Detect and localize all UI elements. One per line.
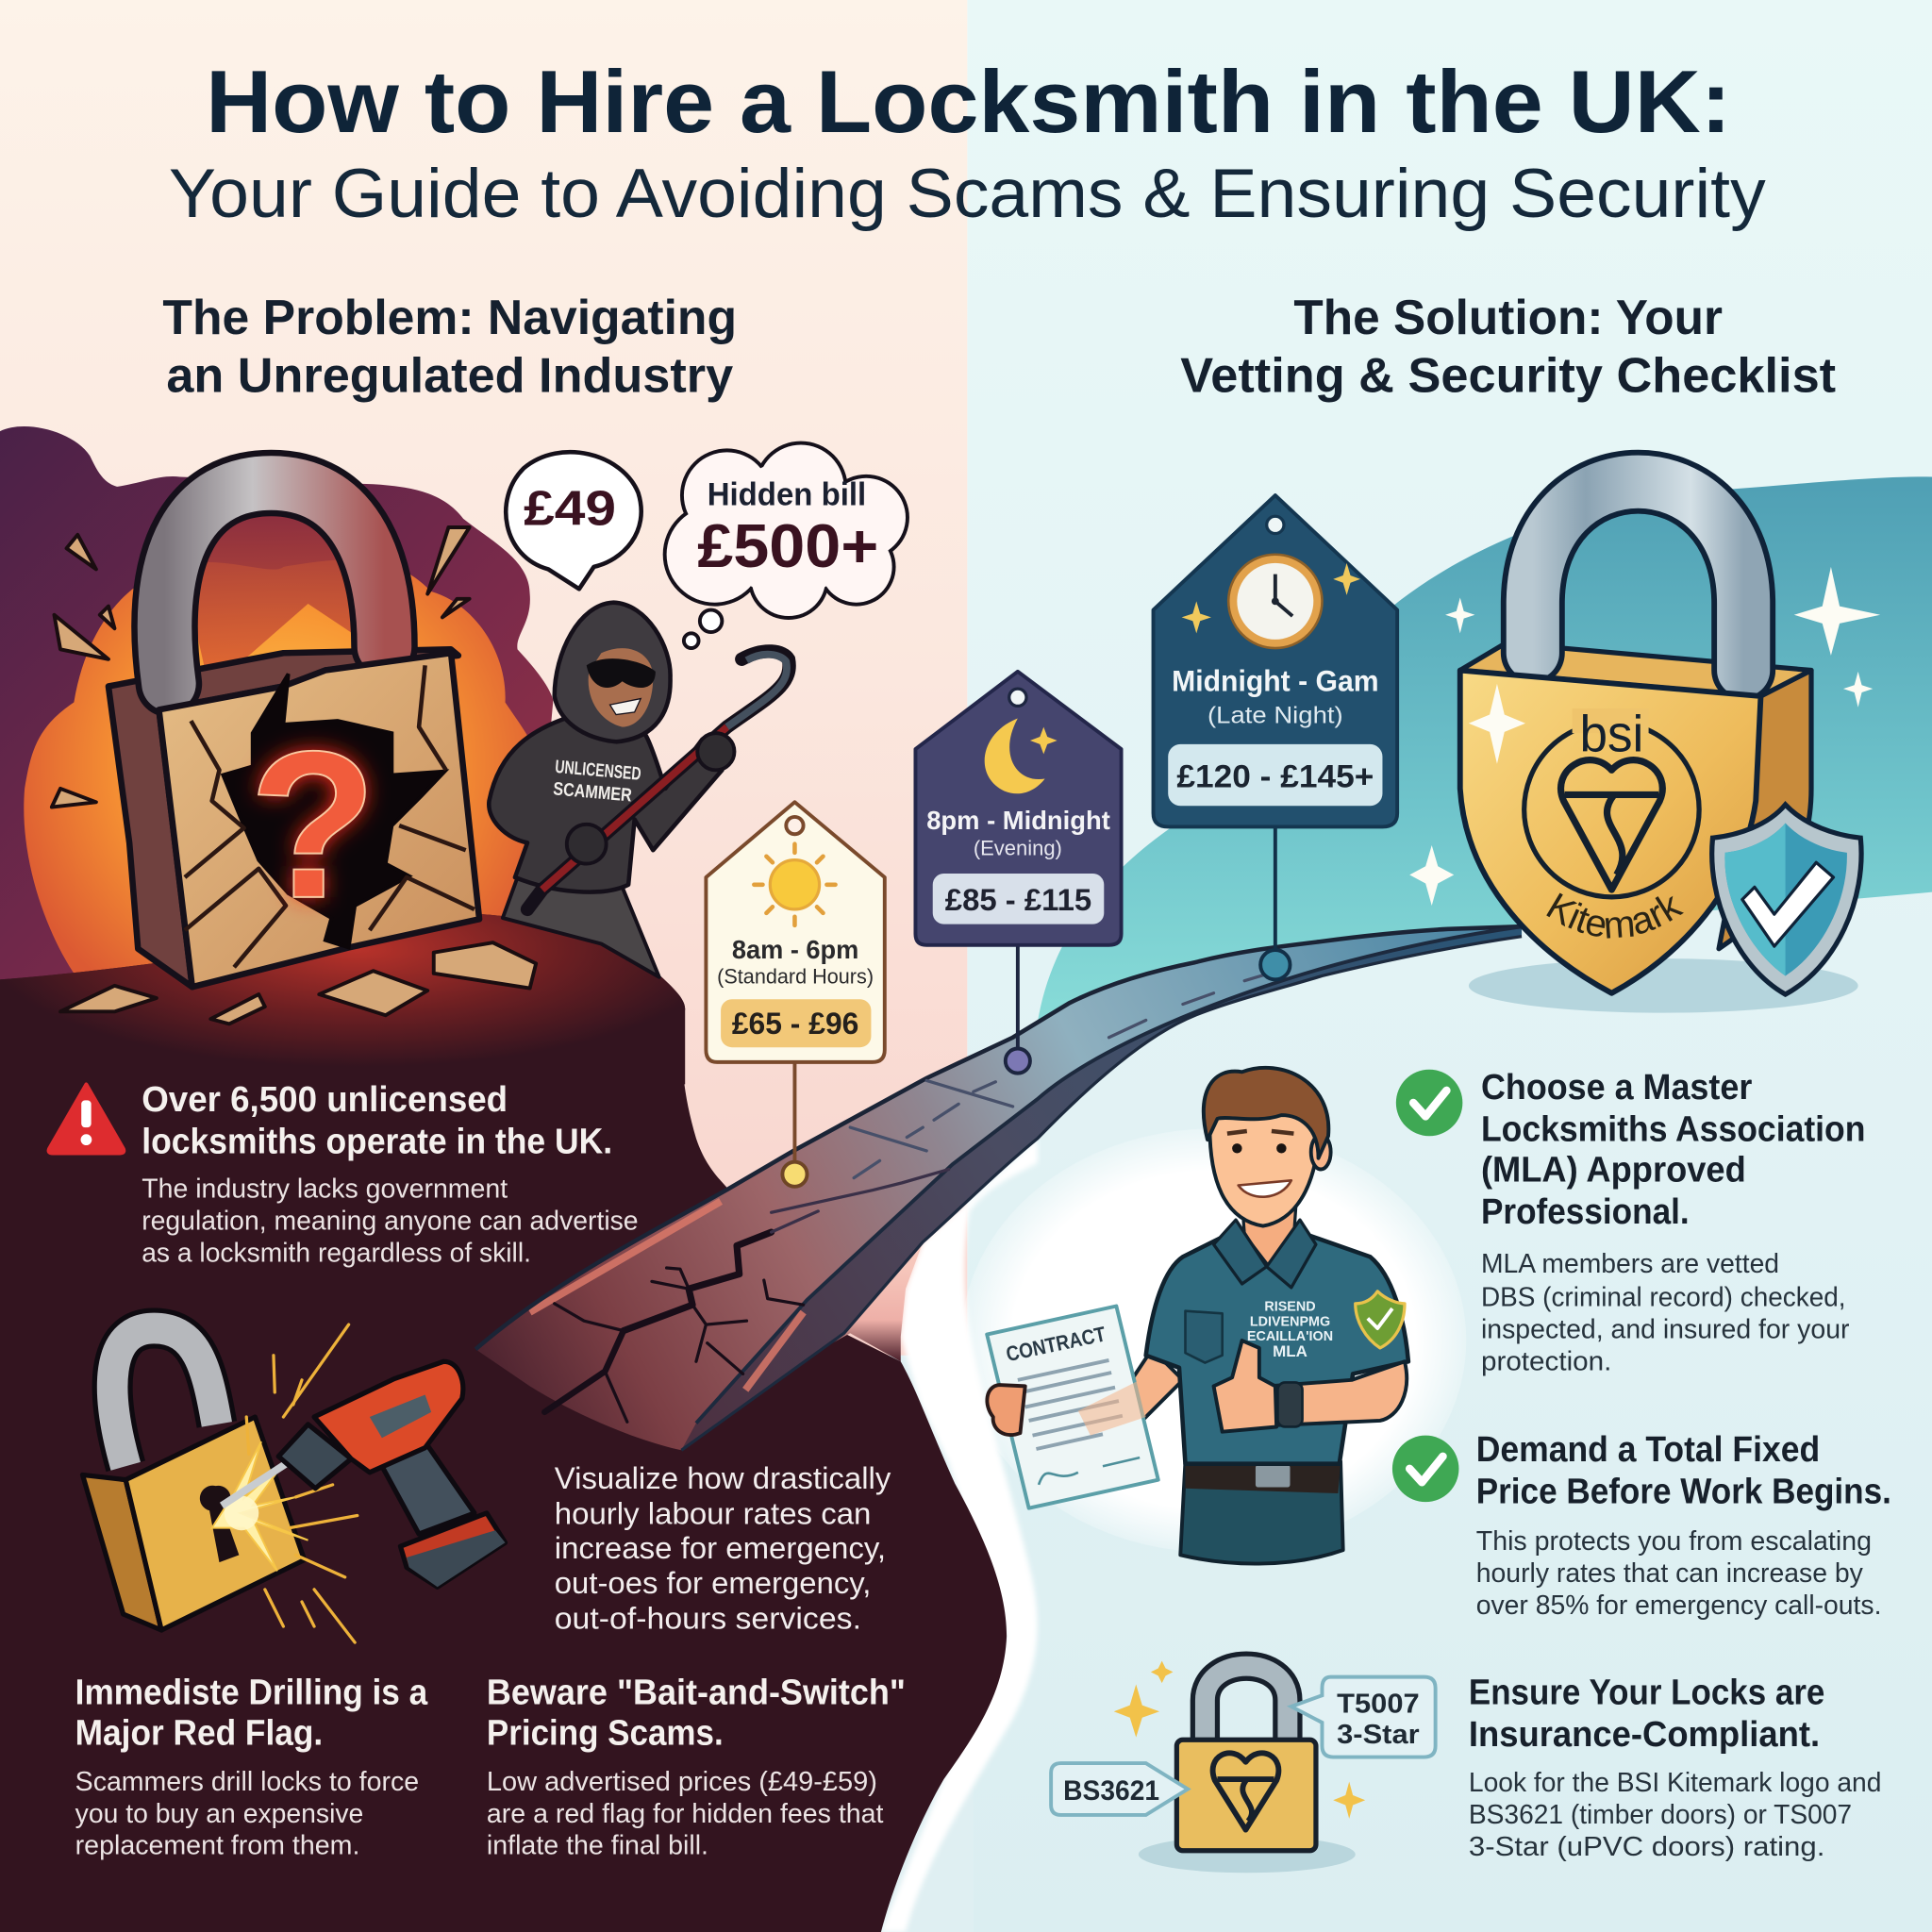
scammer gloves xyxy=(567,824,607,864)
check item: MLA: DBS (criminal record) checked, xyxy=(1481,1282,1846,1312)
scammer face xyxy=(589,648,653,727)
icon: clock xyxy=(1228,555,1322,648)
check item: fixed price: Price Before Work Begins. xyxy=(1476,1472,1891,1511)
alert block: The industry lacks government xyxy=(142,1174,508,1205)
price tag: standard hours xyxy=(706,802,885,1187)
lock shards xyxy=(52,527,536,1024)
speech bubble: £49: £49 xyxy=(524,481,616,536)
belt xyxy=(1185,1460,1341,1493)
title: How to Hire a Locksmith in the UK: xyxy=(206,52,1731,151)
question mark: ? xyxy=(249,708,377,942)
body front face xyxy=(158,653,479,987)
alert block: Over 6,500 unlicensed xyxy=(142,1080,508,1120)
callout: TS007: T5007 xyxy=(1337,1690,1420,1720)
text: visualize rates: out-oes for emergency, xyxy=(555,1565,871,1600)
thought cloud: hidden bill: Hidden bill xyxy=(708,477,866,513)
scammer character xyxy=(489,603,790,977)
drill battery xyxy=(400,1513,506,1587)
icon: gold stars xyxy=(1182,563,1360,633)
drill keyhole xyxy=(200,1486,239,1562)
white curve beside the dark panel xyxy=(881,1139,1038,1932)
title: Your Guide to Avoiding Scams & Ensuring Security xyxy=(169,156,1766,232)
text: immediate drilling: Immediste Drilling is a xyxy=(75,1673,428,1712)
check item: fixed price: Demand a Total Fixed xyxy=(1476,1430,1820,1470)
check item: insurance: Look for the BSI Kitemark logo and xyxy=(1469,1768,1881,1798)
small lock shackle xyxy=(1205,1666,1288,1750)
text: visualize rates: hourly labour rates can xyxy=(555,1496,871,1531)
heading: the solution: The Solution: Your xyxy=(1293,291,1723,345)
text: bait and switch xyxy=(487,1673,906,1861)
gold sparkles xyxy=(1114,1661,1365,1819)
locksmith halo xyxy=(961,1128,1466,1553)
check item: MLA: Locksmiths Association xyxy=(1481,1109,1865,1149)
thumbs up hand xyxy=(1214,1341,1276,1432)
check item: MLA xyxy=(1396,1068,1865,1376)
road surface xyxy=(475,926,1522,1450)
check item: MLA: Professional. xyxy=(1481,1192,1690,1232)
heading: the solution: Vetting & Security Checklist xyxy=(1180,348,1836,403)
callout: BS3621 xyxy=(1051,1763,1188,1815)
contract: CONTRACT xyxy=(1004,1322,1108,1366)
heading: the problem: an Unregulated Industry xyxy=(166,348,733,403)
small lock body xyxy=(1176,1740,1316,1851)
road outer edge line xyxy=(681,937,1522,1450)
text: visualize rates: Visualize how drastically xyxy=(555,1460,891,1495)
trousers xyxy=(1180,1461,1343,1564)
padlock shadow xyxy=(1469,958,1858,1013)
text: immediate drilling: replacement from them. xyxy=(75,1831,359,1861)
icon: green check xyxy=(1396,1070,1462,1136)
road crack xyxy=(544,1170,949,1422)
price tag: evening xyxy=(915,672,1122,1074)
heading: the problem: The Problem: Navigating xyxy=(162,291,737,345)
drill chuck xyxy=(278,1424,351,1489)
drill lock side xyxy=(83,1474,161,1630)
price tag: late night: Midnight - Gam xyxy=(1172,665,1379,698)
price tag: evening: £85 - £115 xyxy=(945,882,1091,917)
body cracks xyxy=(185,665,475,967)
road outer strip xyxy=(681,926,1522,1450)
text: bait and switch: Beware "Bait-and-Switch" xyxy=(487,1673,906,1712)
check item: MLA: Choose a Master xyxy=(1481,1068,1753,1108)
drill bit xyxy=(222,1464,286,1506)
padlock top xyxy=(1460,643,1811,696)
check item: insurance xyxy=(1469,1673,1881,1862)
text: immediate drilling: Scammers drill locks to force xyxy=(75,1767,419,1797)
bsi wordmark: bsi xyxy=(1579,705,1643,763)
check item: fixed price: This protects you from escalating xyxy=(1476,1526,1872,1557)
text: bait and switch: Pricing Scams. xyxy=(487,1713,724,1753)
check item: insurance: BS3621 (timber doors) or TS007 xyxy=(1469,1800,1852,1830)
locksmith character xyxy=(987,1068,1408,1564)
red glow behind shackle legs xyxy=(165,483,385,684)
price tag: late night: (Late Night) xyxy=(1208,704,1343,729)
drill handle xyxy=(382,1433,475,1534)
text: visualize rates: out-of-hours services. xyxy=(555,1601,861,1636)
shirt text xyxy=(552,757,641,807)
orange fire glow xyxy=(24,559,545,974)
check item: insurance: Ensure Your Locks are xyxy=(1469,1673,1824,1712)
road edge line xyxy=(696,926,1522,1424)
drill display xyxy=(370,1395,431,1438)
padlock front xyxy=(1460,671,1760,993)
body side and top xyxy=(108,649,458,987)
check item: MLA: (MLA) Approved xyxy=(1481,1151,1746,1191)
text: immediate drilling: Major Red Flag. xyxy=(75,1713,323,1753)
chest badge text: RISEND xyxy=(1264,1300,1316,1315)
check item: fixed price: over 85% for emergency call-outs. xyxy=(1476,1591,1881,1621)
road dashes xyxy=(850,970,1281,1178)
check item: insurance: Insurance-Compliant. xyxy=(1469,1715,1820,1755)
dark lower-left panel xyxy=(0,914,1007,1932)
text: immediate drilling xyxy=(75,1673,428,1861)
scammer hoodie xyxy=(489,712,722,892)
drill body xyxy=(314,1361,463,1473)
broken padlock xyxy=(52,483,536,1024)
background: lower blue band xyxy=(862,1343,974,1932)
price tag: standard hours: £65 - £96 xyxy=(732,1006,858,1041)
belt buckle xyxy=(1255,1464,1291,1489)
purple smoke cloud xyxy=(0,426,553,986)
crowbar xyxy=(527,651,790,909)
text: visualize rates: increase for emergency, xyxy=(555,1530,886,1565)
broken shackle xyxy=(165,483,385,684)
price tag: evening: (Evening) xyxy=(974,836,1062,859)
shirt text: UNLICENSED xyxy=(554,757,641,785)
icon: moon star xyxy=(1030,727,1058,754)
price tag: late night: £120 - £145+ xyxy=(1176,759,1374,795)
kitemark symbol xyxy=(1561,760,1662,890)
callout: BS3621: BS3621 xyxy=(1063,1775,1159,1807)
neck xyxy=(1242,1201,1296,1267)
chest badge text xyxy=(1247,1300,1333,1360)
ear xyxy=(1311,1135,1331,1170)
price tag: late night xyxy=(1154,495,1397,979)
padlock shackle xyxy=(1533,482,1743,671)
shirt pocket xyxy=(1185,1311,1223,1363)
text: bait and switch: are a red flag for hidden fees that xyxy=(487,1799,883,1829)
question mark glow: ? xyxy=(249,708,377,942)
check item: MLA: protection. xyxy=(1481,1346,1611,1376)
small lock shadow xyxy=(1139,1836,1356,1873)
shield xyxy=(1712,805,1861,994)
price tag: evening: 8pm - Midnight xyxy=(926,806,1110,835)
contract xyxy=(987,1306,1158,1508)
road top edge line xyxy=(475,926,1522,1349)
alert block: regulation, meaning anyone can advertise xyxy=(142,1207,639,1237)
check item: fixed price: hourly rates that can increase by xyxy=(1476,1558,1863,1589)
background: problem side xyxy=(0,0,967,1356)
left arm xyxy=(1078,1349,1183,1429)
drill lock front xyxy=(125,1417,305,1630)
icon: sun xyxy=(754,844,836,925)
text: visualize rates xyxy=(555,1460,891,1636)
forearm xyxy=(1269,1361,1407,1425)
shirt xyxy=(1146,1232,1408,1464)
drilled padlock illustration xyxy=(83,1324,506,1642)
callout: TS007: 3-Star xyxy=(1337,1720,1420,1750)
speech bubble: £49 xyxy=(506,452,641,589)
check item: insurance: 3-Star (uPVC doors) rating. xyxy=(1469,1832,1824,1862)
circle gap behind bsi xyxy=(1573,708,1649,733)
hand on contract xyxy=(987,1385,1025,1435)
icon: warning triangle xyxy=(48,1084,124,1154)
icon: crescent moon xyxy=(985,718,1045,793)
kitemark circle xyxy=(1524,722,1699,897)
chest badge text: LDIVENPMG xyxy=(1250,1314,1330,1329)
thought cloud: hidden bill xyxy=(663,441,909,648)
title xyxy=(169,52,1766,232)
chest badge text: ECAILLA'ION xyxy=(1247,1329,1333,1344)
alert block xyxy=(48,1080,639,1268)
check item: MLA: MLA members are vetted xyxy=(1481,1249,1779,1279)
shirt text: SCAMMER xyxy=(552,778,633,807)
text: immediate drilling: you to buy an expensive xyxy=(75,1799,363,1829)
big gold kitemark padlock xyxy=(1409,449,1880,1013)
scammer mask xyxy=(587,658,656,688)
pink wedge below the road xyxy=(828,1242,923,1361)
sparkles xyxy=(1409,567,1880,906)
icon: green check xyxy=(1392,1436,1458,1502)
alert block: as a locksmith regardless of skill. xyxy=(142,1238,531,1268)
head xyxy=(1209,1091,1319,1226)
check item: fixed price xyxy=(1392,1430,1891,1621)
face xyxy=(1227,1131,1293,1197)
heading: the problem xyxy=(162,291,737,403)
alert block: locksmiths operate in the UK. xyxy=(142,1123,612,1162)
drill lock shackle xyxy=(112,1328,217,1466)
wrist watch xyxy=(1277,1382,1303,1426)
background: solution side xyxy=(967,0,1932,1932)
scammer legs xyxy=(503,877,659,977)
check item: MLA: inspected, and insured for your xyxy=(1481,1314,1850,1344)
heading: the solution xyxy=(1180,291,1836,403)
collar xyxy=(1214,1220,1316,1288)
drill sparks xyxy=(246,1324,358,1642)
padlock side xyxy=(1719,671,1811,949)
winding road xyxy=(475,926,1522,1450)
scammer teeth xyxy=(610,699,641,715)
chest badge text: MLA xyxy=(1273,1342,1307,1360)
drill flash xyxy=(212,1441,308,1571)
small padlock with standards callouts xyxy=(1051,1661,1436,1873)
callout: TS007 xyxy=(1291,1677,1436,1757)
teal hill behind big padlock xyxy=(1038,476,1932,1023)
red sky inside shackle xyxy=(185,498,400,690)
hair xyxy=(1204,1068,1328,1158)
thought cloud: hidden bill: £500+ xyxy=(697,511,878,580)
sleeve shield xyxy=(1356,1291,1405,1348)
small kitemark xyxy=(1213,1753,1278,1830)
text: bait and switch: Low advertised prices (£49-£59) xyxy=(487,1767,877,1797)
kitemark label: Kitemark xyxy=(1546,892,1684,939)
scammer hood xyxy=(555,603,671,741)
hilltop rock xyxy=(0,914,685,1084)
price tag: standard hours: 8am - 6pm xyxy=(732,935,858,964)
price tag: standard hours: (Standard Hours) xyxy=(717,964,874,988)
text: bait and switch: inflate the final bill. xyxy=(487,1831,708,1861)
jagged hole xyxy=(223,674,445,947)
road highlight xyxy=(530,1201,804,1390)
